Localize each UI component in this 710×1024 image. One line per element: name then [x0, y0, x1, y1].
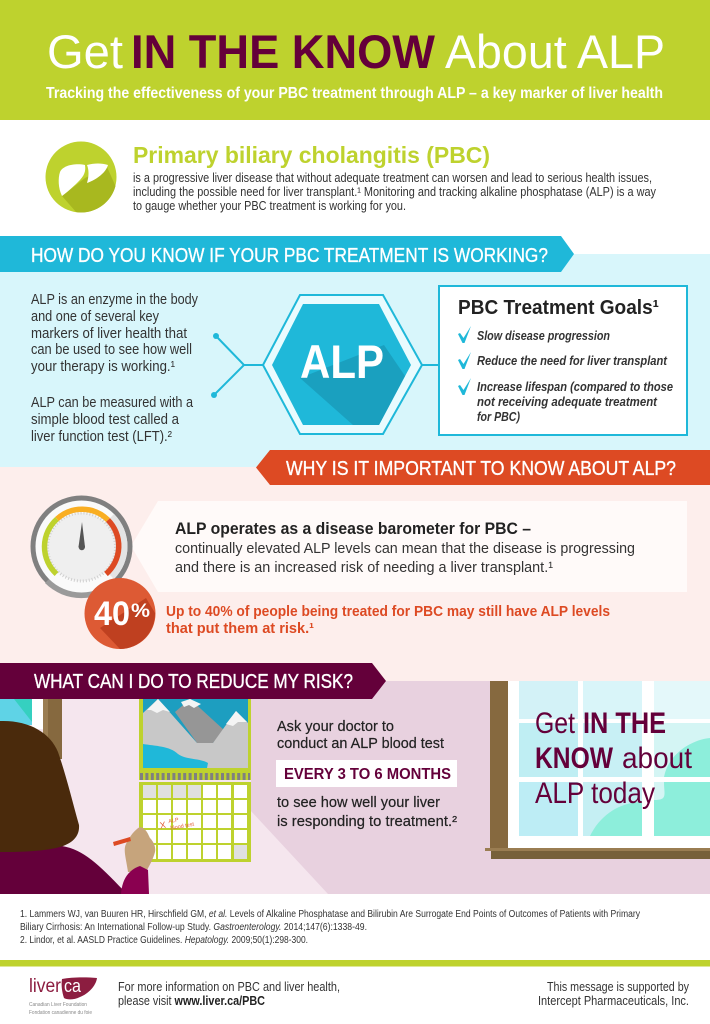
- text: get in the know today: Get: [535, 707, 576, 740]
- goal: increase lifespan: not receiving adequate treatment: [477, 395, 658, 409]
- header banner: IN THE KNOW: [131, 25, 436, 78]
- logo: liver.ca: Fondation canadienne du foie: [29, 1010, 92, 1016]
- calendar mountain photo: [143, 699, 248, 768]
- text: get in the know today: about: [622, 742, 693, 775]
- header banner: About ALP: [445, 25, 665, 78]
- text: sponsor message: [538, 979, 689, 1008]
- footer divider: [0, 960, 710, 966]
- text: what ALP is: and one of several key: [31, 309, 160, 325]
- text: get in the know today: ALP today: [535, 777, 655, 810]
- goal: increase lifespan: Increase lifespan (compared to those: [477, 380, 673, 394]
- logo: liver.ca: [29, 976, 97, 1016]
- icon: liver in green circle: [46, 142, 116, 213]
- text: what ALP is: ALP is an enzyme in the body: [31, 292, 199, 308]
- goal: increase lifespan: for PBC): [477, 410, 520, 424]
- header banner: [0, 0, 710, 120]
- panel: how do you know background: [0, 254, 710, 468]
- panel: PBC treatment goals: [439, 286, 687, 435]
- panel: why important background: [0, 467, 710, 681]
- footnotes: [20, 909, 640, 946]
- text: what ALP is: simple blood test called a: [31, 412, 180, 428]
- panel: reduce risk background: [0, 681, 710, 894]
- callout: disease barometer: ALP operates as a disease barometer for PBC –: [175, 520, 531, 538]
- woman body: [0, 846, 127, 894]
- woman arm: [121, 866, 149, 894]
- woman hand: [125, 827, 155, 872]
- text: more information: [118, 979, 340, 1008]
- illustration: window behind woman: [0, 699, 62, 759]
- heading banner: how do you know: HOW DO YOU KNOW IF YOUR PBC TREATMENT IS WORKING?: [31, 244, 548, 267]
- text: what ALP is: markers of liver health that: [31, 326, 187, 342]
- logo: liver.ca: Canadian Liver Foundation: [29, 1002, 87, 1008]
- text: what ALP is: liver function test (LFT).²: [31, 429, 172, 445]
- intro: primary biliary cholangitis: [133, 142, 657, 213]
- icon: gauge: [30, 496, 132, 598]
- calendar handwriting: [159, 815, 195, 834]
- pen: [113, 837, 131, 846]
- intro: primary biliary cholangitis: Primary biliary cholangitis (PBC): [133, 142, 490, 168]
- intro: primary biliary cholangitis: to gauge whether your PBC treatment is working for you.: [133, 199, 406, 213]
- text: ask your doctor: is responding to treatment.²: [277, 814, 457, 830]
- icon: connector lines: [211, 333, 438, 398]
- header banner: Tracking the effectiveness of your PBC treatment through ALP – a key marker of liver health: [46, 85, 663, 102]
- footnotes: Biliary Cirrhosis: An International Follow-up Study. Gastroenterology. 2014;147(6):1338-49.: [20, 922, 367, 933]
- logo: liver.ca: liver: [29, 976, 62, 997]
- text: what ALP is: can be used to see how well: [31, 342, 192, 358]
- goal: increase lifespan: [477, 380, 673, 424]
- text: get in the know today: [535, 707, 693, 810]
- goal: slow progression: Slow disease progression: [477, 329, 610, 343]
- callout: every 3 to 6 months: EVERY 3 TO 6 MONTHS: [284, 766, 451, 783]
- check: slow progression: [458, 326, 471, 343]
- logo: liver.ca: ca: [64, 976, 82, 996]
- icon: 40 percent circle: 40: [94, 595, 130, 633]
- goal: reduce need: Reduce the need for liver transplant: [477, 354, 668, 368]
- text: ask your doctor: to see how well your liver: [277, 795, 440, 811]
- text: what ALP is: ALP can be measured with a: [31, 395, 194, 411]
- footnotes: 2. Lindor, et al. AASLD Practice Guidelines. Hepatology. 2009;50(1):298-300.: [20, 935, 308, 946]
- text: ask your doctor: Ask your doctor to: [277, 719, 394, 735]
- footnotes: 1. Lammers WJ, van Buuren HR, Hirschfield GM, et al. Levels of Alkaline Phosphatase and Bilirubin Are Surrogate End Points of Outcomes of Patients with Primary: [20, 909, 640, 920]
- callout: disease barometer: [131, 501, 687, 592]
- text: ask your doctor: [276, 719, 457, 830]
- heading banner: reduce risk: [0, 663, 386, 699]
- text: get in the know today: IN THE: [583, 707, 666, 740]
- heading banner: why important: [256, 450, 710, 485]
- check: increase lifespan: [458, 378, 471, 395]
- text: get in the know today: KNOW: [535, 742, 614, 775]
- text: 40 percent at risk: Up to 40% of people being treated for PBC may still have ALP levels: [166, 604, 610, 620]
- icon: ALP hexagon: [263, 295, 422, 434]
- text: 40 percent at risk: [166, 604, 610, 637]
- icon: 40 percent circle: [84, 578, 156, 649]
- calendar handwriting: X: [159, 820, 167, 831]
- calendar binding: [139, 776, 251, 782]
- text: what ALP is: [31, 292, 199, 445]
- text: 40 percent at risk: that put them at risk.¹: [166, 621, 314, 637]
- goals title: PBC Treatment Goals¹: [458, 297, 659, 319]
- icon: 40 percent circle: %: [131, 601, 150, 622]
- woman hair: [0, 721, 79, 852]
- callout: disease barometer: continually elevated ALP levels can mean that the disease is progressing: [175, 540, 635, 557]
- icon: ALP hexagon: ALP: [300, 335, 384, 388]
- calendar date grid: [143, 785, 247, 859]
- calendar handwriting: ALP: [168, 817, 179, 825]
- callout: every 3 to 6 months: [276, 760, 457, 787]
- calendar handwriting: blood test: [170, 822, 195, 832]
- callout: disease barometer: and there is an increased risk of needing a liver transplant.¹: [175, 559, 553, 576]
- illustration: wall calendar: [139, 699, 251, 862]
- check: reduce need: [458, 352, 471, 369]
- text: more information: please visit www.liver.ca/PBC: [118, 993, 266, 1008]
- text: ask your doctor: conduct an ALP blood test: [277, 736, 444, 752]
- heading banner: how do you know: [0, 236, 574, 272]
- text: more information: For more information on PBC and liver health,: [118, 979, 340, 994]
- illustration: woman writing: [0, 721, 155, 894]
- heading banner: reduce risk: WHAT CAN I DO TO REDUCE MY RISK?: [34, 671, 353, 693]
- illustration: window: [485, 681, 710, 859]
- header banner: Get: [47, 25, 123, 78]
- text: what ALP is: your therapy is working.¹: [31, 359, 175, 375]
